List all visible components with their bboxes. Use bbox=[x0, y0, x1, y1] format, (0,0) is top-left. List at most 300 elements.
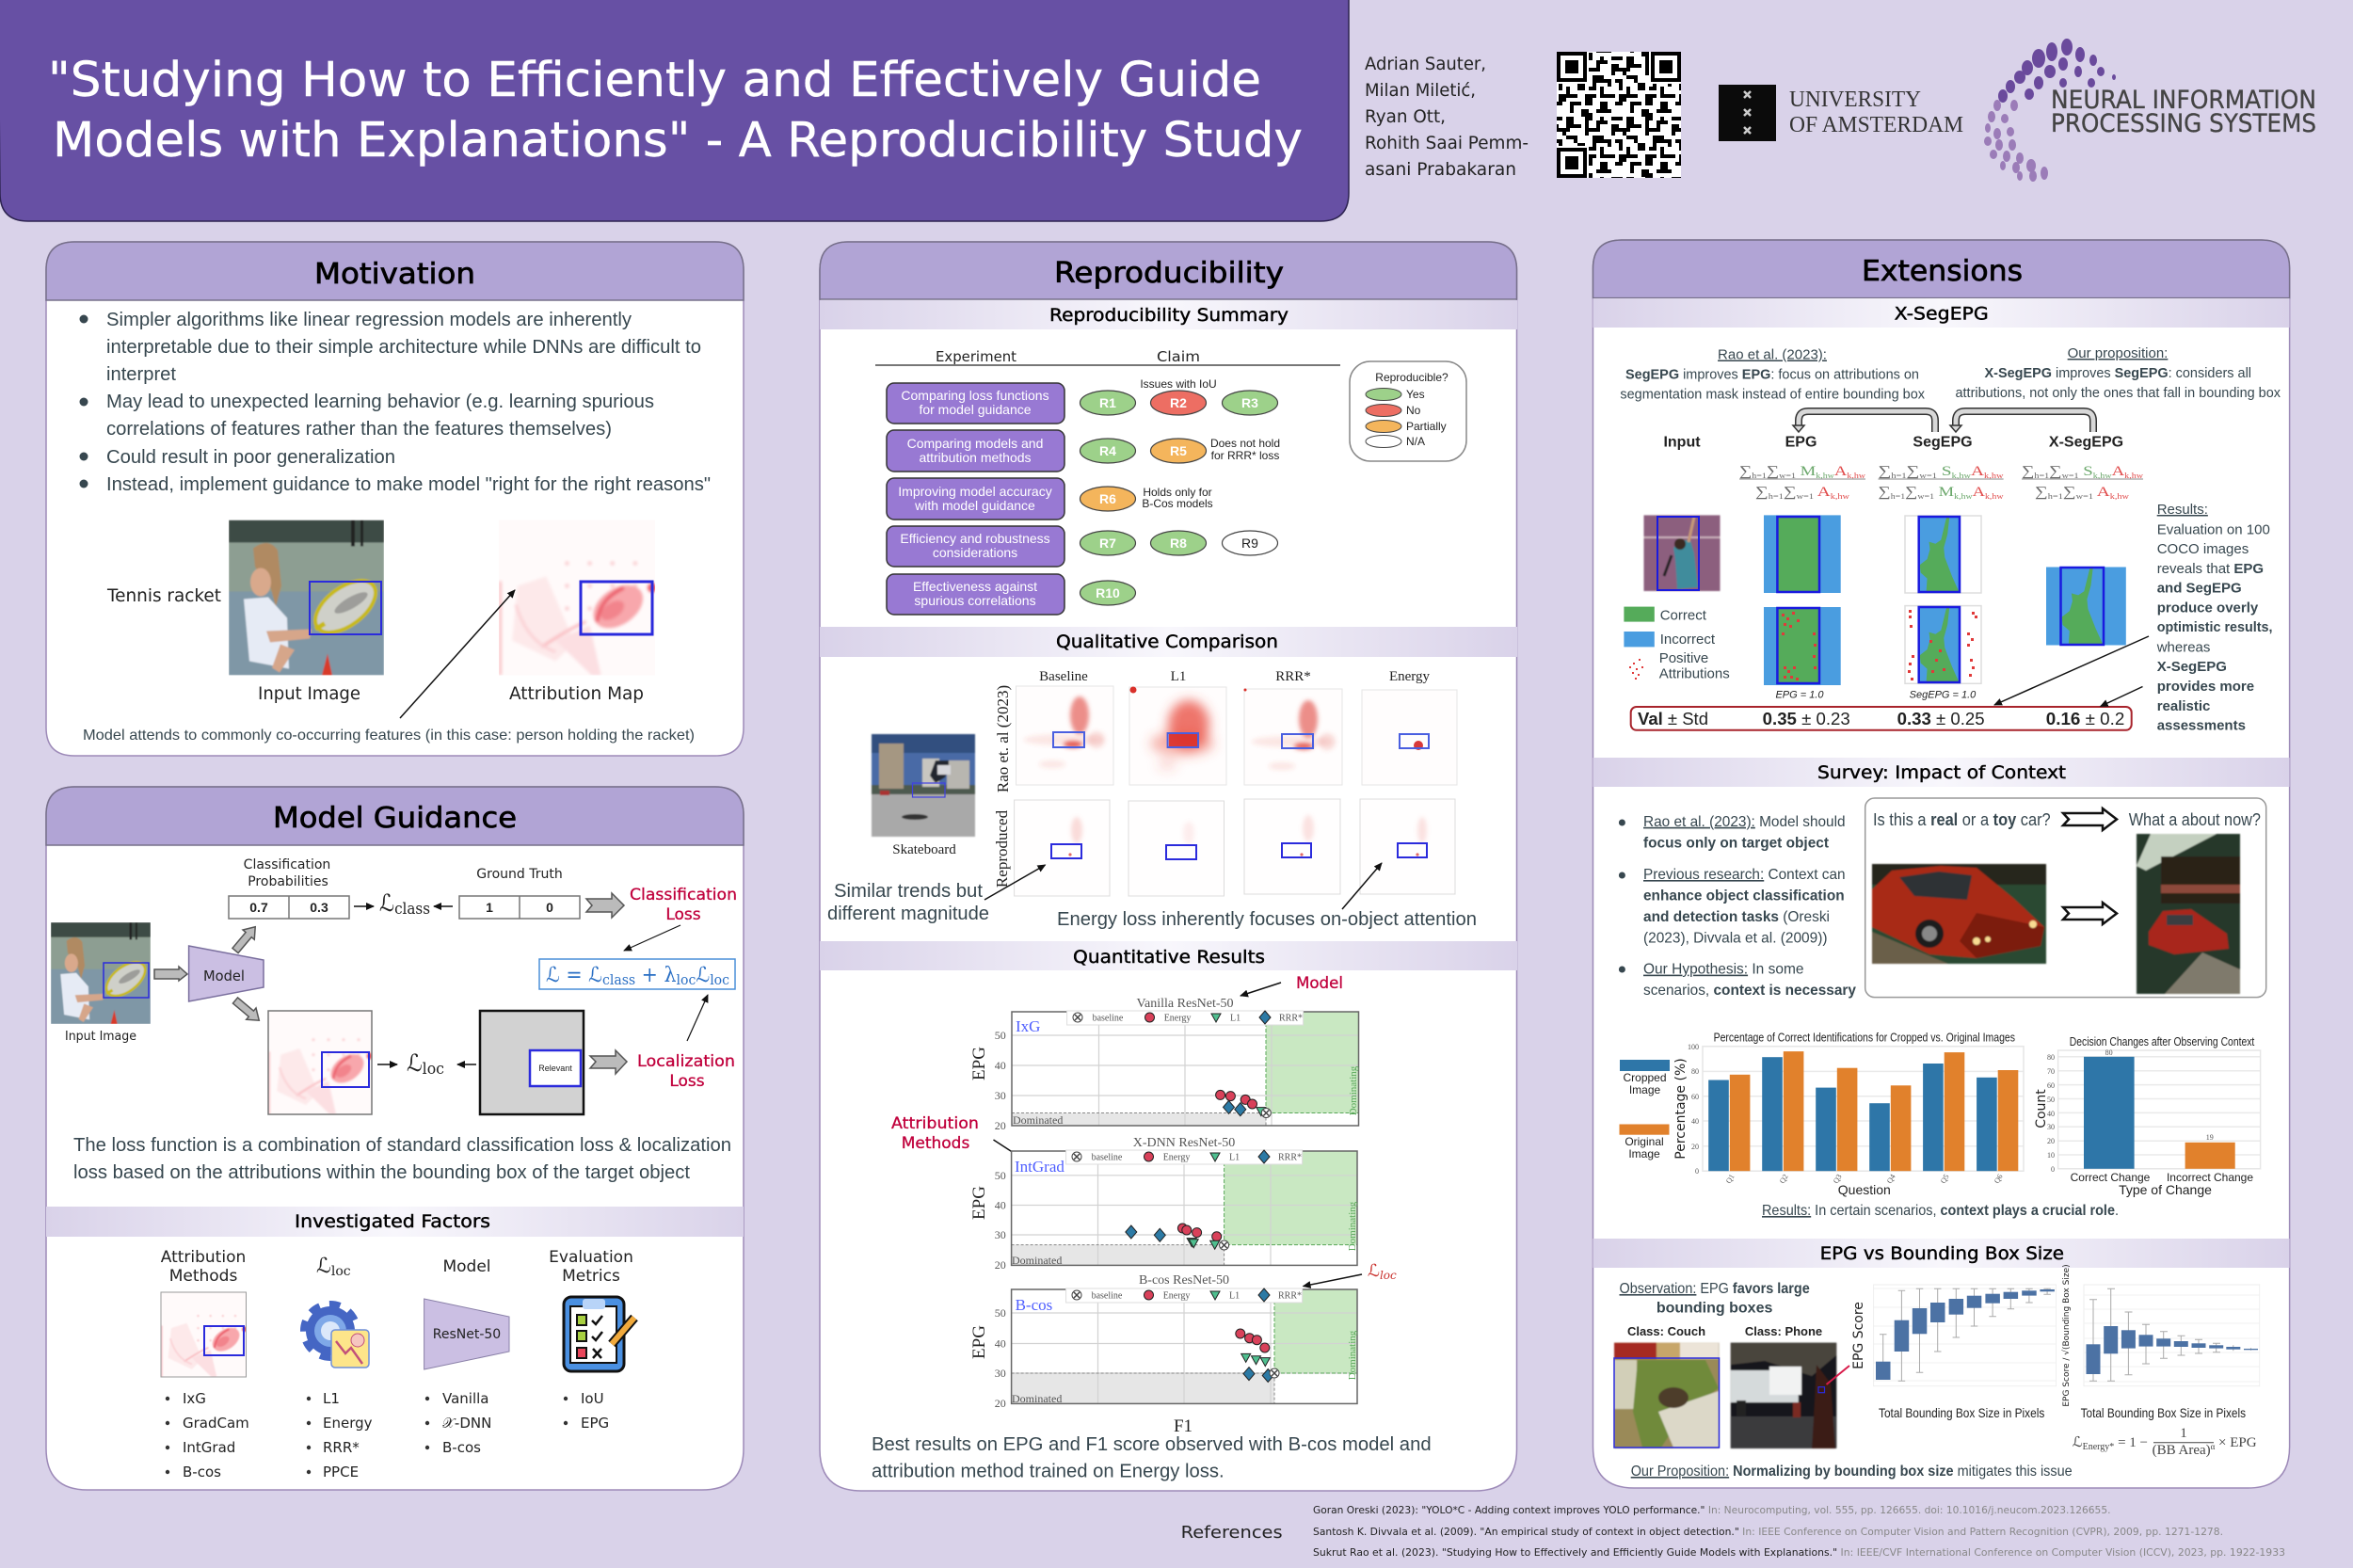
observation text bbox=[1619, 1281, 1810, 1317]
chart: X-DNN ResNet-50: baseline bbox=[1092, 1152, 1123, 1163]
authors: Adrian Sauter, bbox=[1365, 54, 1486, 74]
chart: B-cos ResNet-50: RRR* bbox=[1278, 1291, 1302, 1301]
bar chart: decision changes: Decision Changes after Observing Context bbox=[2070, 1034, 2255, 1048]
legend: attribution colours: Correct bbox=[1660, 608, 1707, 624]
column: evaluation metrics: Metrics bbox=[562, 1267, 620, 1286]
formula: SegEPG: S bbox=[1937, 464, 1952, 479]
chart: X-DNN ResNet-50: 40 bbox=[995, 1199, 1006, 1212]
title bbox=[48, 53, 1303, 168]
chart: X-DNN ResNet-50: L1 bbox=[1229, 1152, 1240, 1163]
model trapezoid bbox=[189, 946, 264, 1001]
experiment boxes: Comparing models and bbox=[907, 436, 1043, 451]
legend: attribution colours bbox=[1624, 607, 1730, 682]
box plot: normalized EPG score: EPG Score / √(Bounding Box Size) bbox=[2061, 1264, 2072, 1407]
column: model bbox=[424, 1257, 509, 1456]
column: attribution methods: Attribution bbox=[161, 1248, 246, 1267]
claim notes: Does not hold bbox=[1210, 437, 1280, 450]
chart: B-cos ResNet-50: baseline bbox=[1092, 1291, 1123, 1301]
chart: X-DNN ResNet-50: IntGrad bbox=[1015, 1158, 1064, 1176]
score captions: SegEPG = 1.0 bbox=[1910, 690, 1977, 701]
annotation: L loc bbox=[1304, 1261, 1397, 1287]
X-SegEPG image bbox=[2046, 567, 2126, 646]
results text: produce overly bbox=[2157, 600, 2259, 616]
formula: SegEPG: w=1 bbox=[1917, 492, 1934, 501]
bar chart: correct identifications: Q4 bbox=[1885, 1173, 1897, 1185]
annotation: similar trends bbox=[827, 865, 1045, 924]
column labels: L1 bbox=[1171, 669, 1186, 684]
bar chart: correct identifications: Q2 bbox=[1778, 1173, 1790, 1185]
text: Rao et al bbox=[1620, 346, 1925, 403]
column heads bbox=[1663, 435, 2123, 450]
legend: cropped vs original: Image bbox=[1629, 1083, 1660, 1096]
arrow: model up bbox=[230, 922, 261, 955]
column: attribution methods: B-cos bbox=[183, 1464, 221, 1480]
annotation: energy loss bbox=[1057, 863, 1477, 930]
formula: SegEPG: ∑ bbox=[1879, 485, 1888, 500]
legend: reproducible: Reproducible? bbox=[1375, 371, 1449, 384]
bar chart: decision changes: 10 bbox=[2047, 1151, 2055, 1160]
survey bullets: Our Hypothesis: In some bbox=[1643, 962, 1804, 978]
chart: X-DNN ResNet-50 bbox=[969, 1136, 1358, 1272]
results text bbox=[2156, 502, 2272, 733]
authors: asani Prabakaran bbox=[1365, 159, 1516, 180]
formula: X-SegEPG: ∑ bbox=[2049, 464, 2062, 479]
label: localization loss bbox=[637, 1052, 735, 1091]
legend: reproducible: Partially bbox=[1406, 420, 1447, 433]
results table: 0.35 ± 0.23 bbox=[1763, 710, 1850, 728]
bar chart: correct identifications bbox=[1673, 1031, 2024, 1197]
logo: University of Amsterdam: UNIVERSITY bbox=[1789, 88, 1921, 112]
legend: reproducible bbox=[1350, 361, 1466, 461]
survey question box bbox=[1865, 798, 2266, 998]
logo: NeurIPS bbox=[1984, 39, 2316, 182]
text: our proposition bbox=[1956, 345, 2281, 401]
label: Tennis racket: Tennis racket bbox=[106, 585, 221, 606]
row label: Rao et al: Rao et. al (2023) bbox=[994, 685, 1012, 792]
results caption: attribution method trained on Energy loss. bbox=[872, 1461, 1225, 1481]
formula: X-SegEPG bbox=[2022, 464, 2143, 501]
column labels: Baseline bbox=[1039, 669, 1088, 684]
legend: attribution colours: Incorrect bbox=[1660, 632, 1716, 648]
box plot: EPG score bbox=[1851, 1285, 2057, 1420]
subheading band: Reproducibility Summary bbox=[820, 300, 1517, 329]
heatmaps: Reproduced row bbox=[1015, 799, 1455, 896]
heatmaps: Rao et al row bbox=[1016, 686, 1457, 785]
arrow: SegEPG to EPG bbox=[1793, 411, 1935, 432]
input image: Input Image bbox=[65, 1030, 136, 1044]
caption: input image: Input Image bbox=[258, 683, 360, 704]
heading: Motivation: Motivation bbox=[314, 258, 475, 291]
formula: X-SegEPG: S bbox=[2079, 464, 2093, 479]
claim notes: Holds only for bbox=[1143, 486, 1212, 499]
text: Rao et al: segmentation mask instead of entire bounding box bbox=[1620, 387, 1925, 403]
attribution map bbox=[268, 1011, 373, 1114]
claim notes bbox=[1140, 377, 1280, 510]
column labels bbox=[1039, 669, 1431, 684]
subheading band: Investigated Factors: Investigated Factors bbox=[295, 1211, 490, 1232]
loss description bbox=[73, 1135, 731, 1183]
text: Rao et al: SegEPG improves EPG: focus on attributions on bbox=[1625, 367, 1919, 383]
classification probabilities: 0.7 bbox=[249, 900, 268, 915]
box plot: normalized EPG score bbox=[2061, 1264, 2260, 1420]
title: "Studying How to Efficiently and Effectively Guide bbox=[48, 53, 1261, 108]
subheading band: Quantitative Results: Quantitative Results bbox=[1073, 947, 1265, 968]
panel: Extensions bbox=[1593, 240, 2290, 1488]
claim labels: R1 bbox=[1099, 395, 1116, 410]
bar chart: decision changes: 50 bbox=[2047, 1096, 2055, 1104]
claim labels: R10 bbox=[1096, 585, 1120, 600]
formula: energy normalized: α bbox=[2211, 1442, 2216, 1451]
label: classification loss: Classification bbox=[630, 886, 737, 904]
annotation: energy loss: Energy loss inherently focuses on-object attention bbox=[1057, 909, 1477, 930]
score captions bbox=[1775, 690, 1977, 701]
bar chart: correct identifications: 20 bbox=[1691, 1143, 1699, 1151]
bar chart: correct identifications: 100 bbox=[1688, 1043, 1699, 1051]
arrow: classification loss to formula bbox=[624, 925, 680, 951]
chart: Vanilla ResNet-50: 40 bbox=[995, 1059, 1006, 1072]
arrow: X-SegEPG to SegEPG bbox=[1950, 411, 2093, 432]
L class: class bbox=[394, 900, 430, 919]
formula: EPG: ∑ bbox=[1755, 485, 1766, 500]
experiment boxes bbox=[887, 383, 1064, 615]
formula: EPG: k,hw bbox=[1816, 472, 1834, 480]
chart: Vanilla ResNet-50: IxG bbox=[1016, 1017, 1040, 1035]
EPG top image bbox=[1764, 515, 1841, 593]
score captions: EPG = 1.0 bbox=[1775, 690, 1824, 701]
results text: Evaluation on 100 bbox=[2157, 521, 2270, 537]
results text: and SegEPG bbox=[2157, 580, 2242, 597]
bar chart: decision changes: 30 bbox=[2047, 1123, 2055, 1131]
bar chart: decision changes: 80 bbox=[2047, 1053, 2055, 1062]
heading: Model Guidance: Model Guidance bbox=[273, 802, 517, 835]
formula: SegEPG: ∑ bbox=[1907, 464, 1919, 479]
bar chart: correct identifications: Q6 bbox=[1993, 1173, 2005, 1185]
column: model: Model bbox=[442, 1257, 491, 1276]
arrow to attribution map bbox=[400, 590, 515, 718]
formula: energy normalized: Energy* bbox=[2083, 1442, 2114, 1452]
formula: X-SegEPG: k,hw bbox=[2110, 492, 2129, 501]
chart: B-cos ResNet-50: Energy bbox=[1163, 1291, 1190, 1301]
model trapezoid: Model bbox=[203, 968, 245, 984]
results text: provides more bbox=[2157, 679, 2254, 695]
column labels: Energy bbox=[1389, 669, 1431, 684]
chart: B-cos ResNet-50: 20 bbox=[995, 1397, 1006, 1410]
subheading band: Reproducibility Summary: Reproducibility Summary bbox=[1049, 305, 1289, 326]
text: our proposition: Our proposition: bbox=[2068, 345, 2168, 361]
chart: Vanilla ResNet-50: 50 bbox=[995, 1029, 1006, 1042]
formula: EPG: h=1 bbox=[1752, 472, 1767, 480]
label: localization loss: Localization bbox=[637, 1052, 735, 1071]
arrow: outlined bottom bbox=[2063, 903, 2117, 924]
results text: optimistic results, bbox=[2157, 619, 2272, 635]
results text: COCO images bbox=[2157, 541, 2249, 557]
legend: reproducible: No bbox=[1406, 404, 1421, 417]
input bounding box bbox=[1657, 517, 1699, 590]
column: attribution methods: IxG bbox=[183, 1390, 206, 1407]
formula: energy normalized: 1 bbox=[2180, 1426, 2187, 1441]
results table bbox=[1631, 707, 2132, 730]
logo: University of Amsterdam: OF AMSTERDAM bbox=[1789, 113, 1963, 137]
chart: X-DNN ResNet-50: Energy bbox=[1163, 1152, 1190, 1163]
bullet list bbox=[79, 310, 711, 495]
formula: SegEPG: k,hw bbox=[1984, 472, 2004, 480]
ground truth: 1 bbox=[486, 900, 493, 915]
experiment boxes: Comparing loss functions bbox=[901, 388, 1049, 403]
formula: X-SegEPG: ∑ bbox=[2063, 485, 2076, 500]
formula: SegEPG: ∑ bbox=[1905, 485, 1917, 500]
formula: EPG: k,hw bbox=[1847, 472, 1865, 480]
bar chart: correct identifications: 60 bbox=[1691, 1093, 1699, 1101]
subheading band: Investigated Factors bbox=[46, 1207, 744, 1237]
formula: X-SegEPG: ∑ bbox=[2035, 485, 2045, 500]
claim notes: B-Cos models bbox=[1142, 497, 1213, 510]
photo: phone bbox=[1731, 1324, 1836, 1448]
survey question box: What a about now? bbox=[2129, 810, 2261, 829]
table headers bbox=[875, 348, 1340, 365]
column: L loc: loc bbox=[331, 1264, 351, 1279]
table headers: Claim bbox=[1157, 348, 1200, 365]
arrow: model down bbox=[231, 995, 264, 1026]
photo: tennis input image bbox=[229, 520, 385, 676]
claim labels bbox=[1096, 395, 1258, 600]
formula: X-SegEPG: h=1 bbox=[2034, 472, 2049, 480]
arrow: to classification loss bbox=[586, 893, 624, 918]
chart: B-cos ResNet-50: B-cos bbox=[1016, 1296, 1052, 1314]
bar chart: decision changes bbox=[2034, 1034, 2261, 1197]
formula: SegEPG: ∑ bbox=[1879, 464, 1888, 479]
claim notes: Issues with IoU bbox=[1140, 377, 1217, 391]
legend: cropped vs original: Original bbox=[1625, 1135, 1664, 1148]
legend: attribution colours: Attributions bbox=[1659, 666, 1730, 682]
authors: Ryan Ott, bbox=[1365, 106, 1446, 127]
chart: B-cos ResNet-50: 40 bbox=[995, 1336, 1006, 1350]
subheading band: Survey: Survey: Impact of Context bbox=[1817, 762, 2066, 783]
column: attribution methods bbox=[161, 1248, 249, 1480]
results text: assessments bbox=[2157, 717, 2246, 733]
arrow: to localization loss bbox=[590, 1050, 627, 1074]
bar chart: decision changes: 20 bbox=[2047, 1137, 2055, 1145]
icon: gear with chart bbox=[305, 1305, 369, 1368]
experiment boxes: attribution methods bbox=[919, 450, 1032, 465]
formula: X-SegEPG: k,hw bbox=[2124, 472, 2143, 480]
photo: skateboard: Skateboard bbox=[892, 842, 956, 857]
bullet list: interpret bbox=[106, 364, 176, 385]
references heading: References bbox=[1181, 1523, 1283, 1543]
observation text: bounding boxes bbox=[1657, 1301, 1772, 1317]
arrow: outlined top bbox=[2063, 808, 2117, 830]
box plot: normalized EPG score: Total Bounding Box Size in Pixels bbox=[2081, 1405, 2246, 1420]
caption: attribution map: Attribution Map bbox=[509, 683, 644, 704]
loss description: The loss function is a combination of standard classification loss & localization bbox=[73, 1135, 731, 1156]
logo: University of Amsterdam bbox=[1719, 85, 1963, 141]
bar chart: decision changes: 80 bbox=[2105, 1048, 2113, 1057]
references list bbox=[1313, 1504, 2285, 1559]
formula: X-SegEPG: k,hw bbox=[2093, 472, 2112, 480]
survey bullets bbox=[1619, 814, 1856, 999]
chart: B-cos ResNet-50: Dominating bbox=[1347, 1330, 1358, 1380]
column: model: Vanilla bbox=[442, 1390, 489, 1407]
bar chart: correct identifications: Q5 bbox=[1939, 1173, 1951, 1185]
chart: Vanilla ResNet-50: Vanilla ResNet-50 bbox=[1136, 997, 1234, 1011]
input image bbox=[51, 922, 151, 1044]
authors bbox=[1365, 54, 1529, 180]
observation text: Observation: EPG favors large bbox=[1619, 1281, 1810, 1297]
formula: SegEPG: k,hw bbox=[1954, 492, 1973, 501]
bar chart: correct identifications: Q1 bbox=[1724, 1173, 1737, 1185]
chart: B-cos ResNet-50 bbox=[969, 1273, 1358, 1410]
subheading band: EPG vs Bounding Box Size: EPG vs Bounding Box Size bbox=[1820, 1243, 2064, 1264]
results text: whereas bbox=[2156, 640, 2210, 656]
chart: B-cos ResNet-50: EPG bbox=[969, 1325, 989, 1359]
survey bullets: focus only on target object bbox=[1643, 836, 1830, 852]
results table: 0.33 ± 0.25 bbox=[1897, 710, 1985, 728]
formula: SegEPG: k,hw bbox=[1952, 472, 1971, 480]
bar chart: correct identifications: Percentage (%) bbox=[1673, 1058, 1689, 1160]
label: localization loss: Loss bbox=[669, 1072, 705, 1091]
relevance mask bbox=[480, 1011, 584, 1114]
chart: Vanilla ResNet-50: baseline bbox=[1093, 1013, 1124, 1024]
results text: realistic bbox=[2157, 698, 2210, 714]
formula box: class bbox=[602, 971, 635, 988]
photo: skateboard bbox=[872, 734, 975, 857]
formula: EPG: h=1 bbox=[1769, 492, 1784, 501]
column: model: B-cos bbox=[442, 1439, 481, 1456]
photo: red car in context bbox=[2137, 834, 2240, 994]
chart: Vanilla ResNet-50: Dominated bbox=[1013, 1113, 1063, 1127]
loss description: loss based on the attributions within the bounding box of the target object bbox=[73, 1162, 690, 1183]
annotation: Attribution Methods: Methods bbox=[902, 1134, 969, 1153]
bar chart: decision changes: 40 bbox=[2047, 1110, 2055, 1118]
formula box: ℒ bbox=[696, 964, 710, 987]
column: attribution methods: IntGrad bbox=[183, 1439, 235, 1456]
formula: SegEPG: h=1 bbox=[1891, 492, 1905, 501]
title: Models with Explanations" - A Reproducibility Study bbox=[53, 113, 1303, 168]
title banner bbox=[0, 0, 1349, 221]
column heads: X-SegEPG bbox=[2049, 435, 2123, 450]
formula box: loc bbox=[710, 971, 729, 988]
box plot: EPG score: EPG Score bbox=[1851, 1302, 1866, 1369]
references list: Santosh K. Divvala et al. (2009). "An empirical study of context in object detection." In: IEEE Conference on Computer Vision and Pattern Recognition (CVPR), 2009, pp. 1271-1278. bbox=[1313, 1526, 2223, 1538]
label: classification loss bbox=[630, 886, 737, 924]
chart: X-DNN ResNet-50: 20 bbox=[995, 1258, 1006, 1272]
chart: Vanilla ResNet-50 bbox=[969, 997, 1359, 1132]
claim labels: R6 bbox=[1099, 491, 1116, 506]
L loc: ℒ bbox=[407, 1049, 424, 1077]
chart: X-DNN ResNet-50: RRR* bbox=[1278, 1152, 1302, 1163]
box plot: EPG score: Total Bounding Box Size in Pixels bbox=[1879, 1405, 2044, 1420]
chart: B-cos ResNet-50: 30 bbox=[995, 1367, 1006, 1380]
column: evaluation metrics bbox=[549, 1248, 634, 1432]
column: model: 𝒳-DNN bbox=[442, 1415, 491, 1432]
survey bullets: Previous research: Context can bbox=[1643, 867, 1846, 883]
axis label: F1: F1 bbox=[1174, 1416, 1193, 1436]
ground truth bbox=[459, 867, 580, 919]
bar chart: correct identifications: Percentage of Correct Identifications for Cropped vs. Original Images bbox=[1714, 1031, 2015, 1045]
legend: attribution colours: Positive bbox=[1659, 650, 1708, 666]
formula: EPG: A bbox=[1834, 464, 1848, 479]
formula: energy normalized bbox=[2073, 1426, 2257, 1458]
chart: Vanilla ResNet-50: L1 bbox=[1230, 1013, 1241, 1024]
bar chart: correct identifications: 0 bbox=[1695, 1167, 1699, 1176]
diagram: model guidance pipeline bbox=[51, 857, 737, 1114]
formula: X-SegEPG: A bbox=[2093, 485, 2110, 500]
arrow: image to model bbox=[154, 967, 187, 981]
column: model: ResNet-50 bbox=[433, 1327, 501, 1342]
column: L loc: ℒ bbox=[316, 1255, 331, 1278]
EPG bottom image with attributions bbox=[1764, 607, 1841, 685]
chart: X-DNN ResNet-50: EPG bbox=[969, 1186, 989, 1220]
chart: B-cos ResNet-50: 50 bbox=[995, 1306, 1006, 1320]
arrow: results to X-SegEPG value bbox=[2101, 687, 2142, 706]
annotation: Model: Model bbox=[1296, 974, 1343, 993]
photo: tennis serve bbox=[1643, 515, 1721, 591]
formula: X-SegEPG: A bbox=[2112, 464, 2124, 479]
subheading band: X-SegEPG bbox=[1593, 298, 2289, 328]
column: evaluation metrics: Evaluation bbox=[549, 1248, 633, 1267]
bullet list: Could result in poor generalization bbox=[106, 447, 395, 468]
label: classification loss: Loss bbox=[665, 905, 701, 924]
photo: red car close-up bbox=[1872, 864, 2046, 964]
chart: Vanilla ResNet-50: Energy bbox=[1164, 1013, 1191, 1024]
row label: Reproduced: Reproduced bbox=[993, 809, 1011, 888]
authors: Rohith Saai Pemm- bbox=[1365, 133, 1529, 153]
L class bbox=[354, 889, 453, 919]
bar chart: correct identifications: 40 bbox=[1691, 1117, 1699, 1126]
formula: SegEPG: w=1 bbox=[1919, 472, 1937, 480]
column heads: EPG bbox=[1785, 435, 1817, 450]
photo: phone: Class: Phone bbox=[1745, 1324, 1822, 1338]
logo: NeurIPS: NEURAL INFORMATION bbox=[2051, 86, 2316, 115]
heading: Reproducibility: Reproducibility bbox=[1054, 257, 1284, 290]
bar chart: correct identifications: 80 bbox=[1691, 1067, 1699, 1076]
results text: reveals that EPG bbox=[2157, 561, 2264, 577]
L loc: loc bbox=[423, 1060, 444, 1079]
formula: EPG bbox=[1739, 464, 1865, 501]
chart: Vanilla ResNet-50: 20 bbox=[995, 1119, 1006, 1132]
legend: reproducible: N/A bbox=[1406, 435, 1425, 448]
formula: SegEPG: h=1 bbox=[1891, 472, 1907, 480]
formula box: loc bbox=[677, 971, 696, 988]
bar chart: decision changes: Correct Change bbox=[2071, 1171, 2151, 1184]
column: L loc: PPCE bbox=[323, 1464, 359, 1480]
survey bullets: Rao et al. (2023): Model should bbox=[1643, 814, 1846, 830]
column: attribution methods: Methods bbox=[169, 1267, 237, 1286]
bullet list: Simpler algorithms like linear regression models are inherently bbox=[106, 310, 632, 330]
formula: energy normalized: ℒ bbox=[2073, 1435, 2083, 1450]
legend: cropped vs original bbox=[1619, 1060, 1670, 1160]
claim ellipses bbox=[1080, 391, 1278, 605]
column labels: RRR* bbox=[1275, 669, 1311, 684]
formula: X-SegEPG: w=1 bbox=[2076, 492, 2093, 501]
experiment boxes: Efficiency and robustness bbox=[900, 531, 1050, 546]
bullet list: May lead to unexpected learning behavior (e.g. learning spurious bbox=[106, 392, 654, 412]
formula: EPG: M bbox=[1796, 464, 1816, 479]
references list: Sukrut Rao et al. (2023). "Studying How to Effectively and Efficiently Guide Models with Explanations." In: IEEE/CVF International Conference on Computer Vision (ICCV), 2023, pp. 1922-1933 bbox=[1313, 1546, 2285, 1559]
column heads: Input bbox=[1663, 435, 1701, 450]
caption text: Model attends to commonly co-occurring features (in this case: person holding the racket) bbox=[83, 728, 695, 744]
claim labels: R8 bbox=[1170, 536, 1187, 551]
annotation: L loc: loc bbox=[1380, 1269, 1397, 1282]
text: our proposition: X-SegEPG improves SegEPG: considers all bbox=[1984, 365, 2251, 381]
formula: X-SegEPG: h=1 bbox=[2048, 492, 2063, 501]
subheading band: EPG vs Bounding Box Size bbox=[1593, 1239, 2289, 1268]
chart: B-cos ResNet-50: L1 bbox=[1229, 1291, 1240, 1301]
experiment boxes: Improving model accuracy bbox=[898, 484, 1052, 499]
subheading band: Quantitative Results bbox=[820, 941, 1517, 970]
results text: X-SegEPG bbox=[2157, 659, 2227, 675]
SegEPG bottom image with attributions bbox=[1905, 606, 1981, 683]
survey bullets: enhance object classification bbox=[1643, 888, 1845, 904]
